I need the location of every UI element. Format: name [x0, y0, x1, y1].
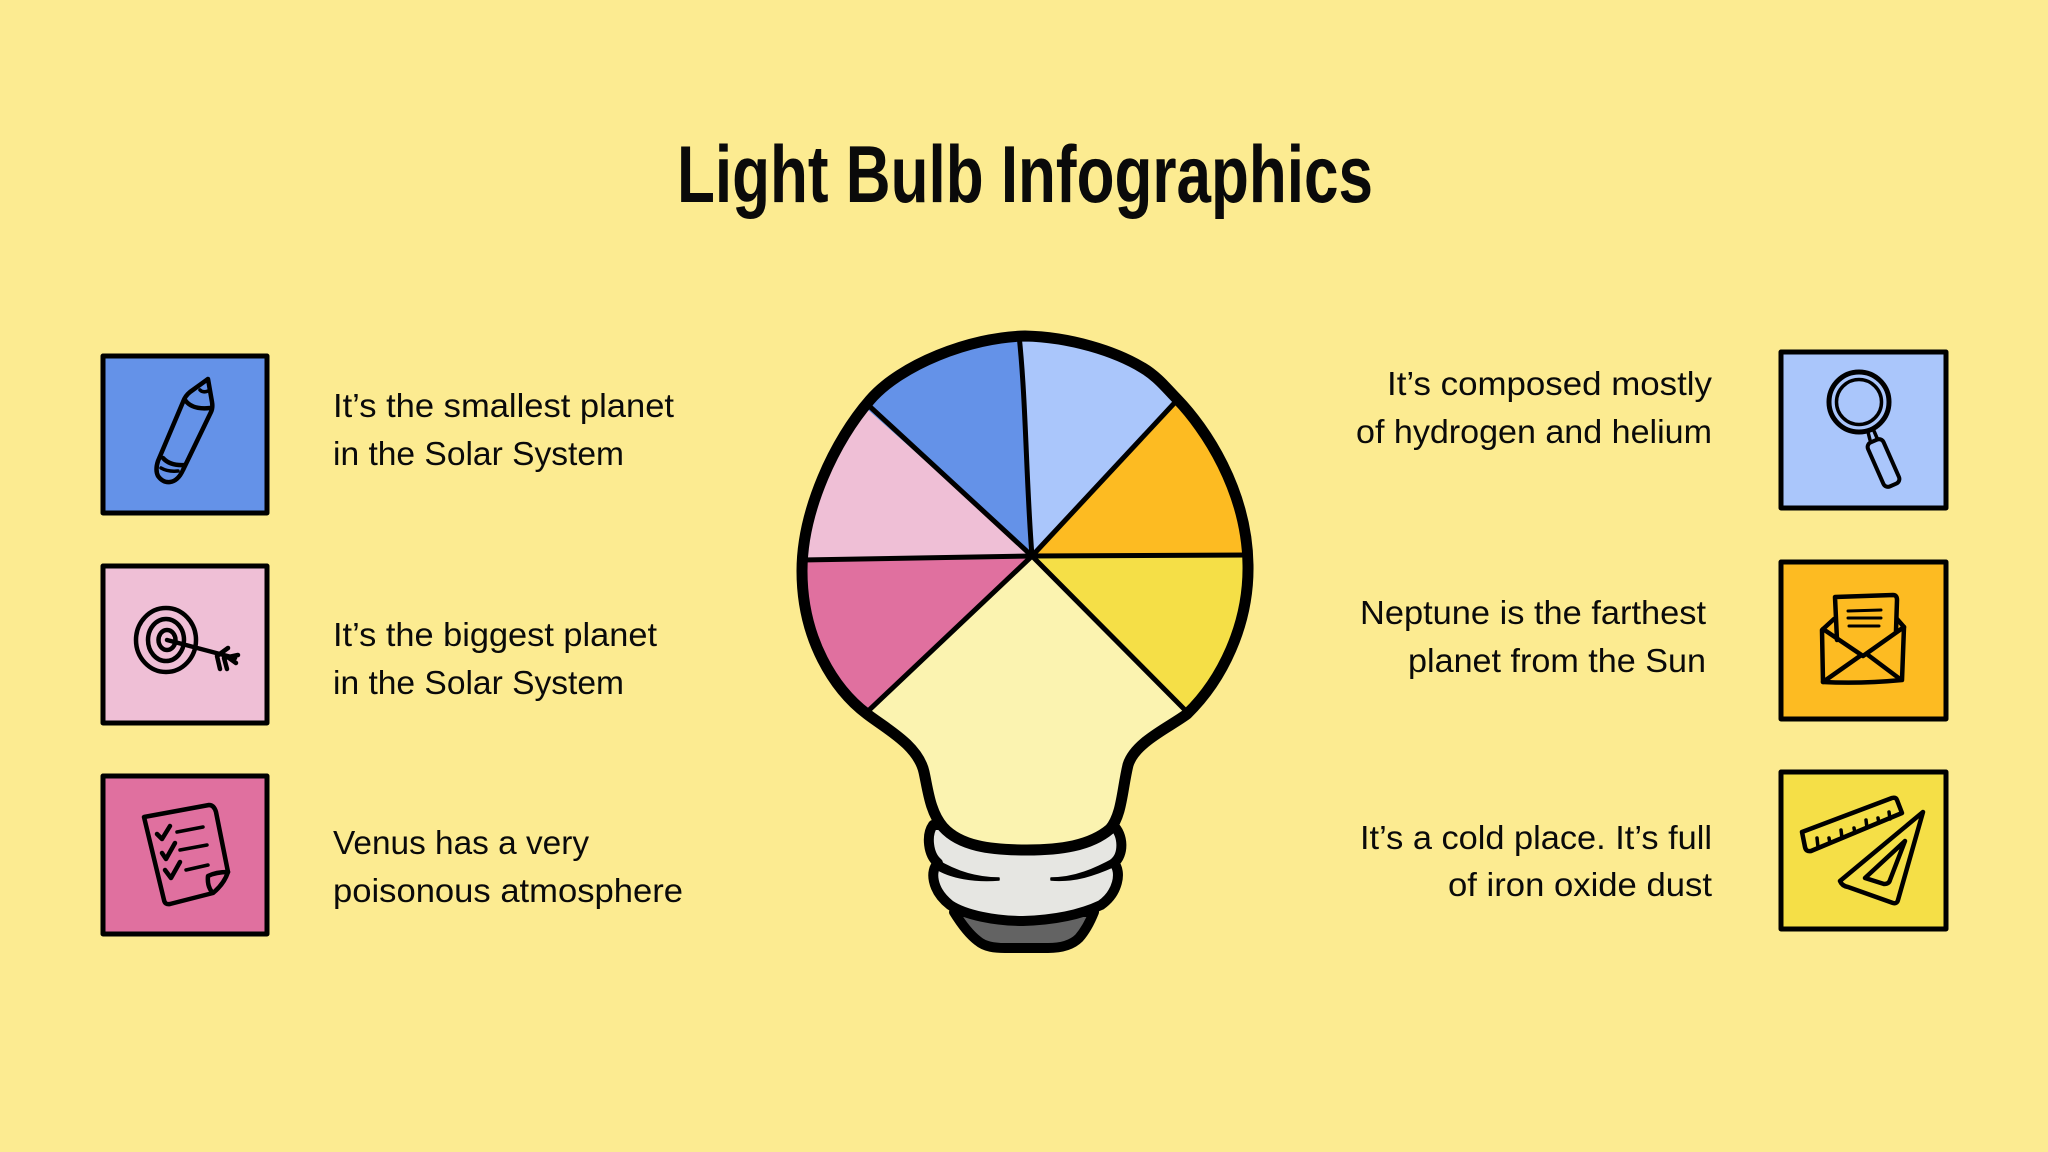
panel: smallest planet [103, 356, 674, 513]
segment: yellow [1038, 558, 1242, 710]
segment dividers [800, 335, 1250, 714]
icon: target with arrow [136, 608, 238, 672]
icon box: pink [103, 566, 267, 723]
icon: magnifying glass [1829, 372, 1901, 488]
text: biggest planet: in the Solar System [333, 664, 624, 701]
icon: checklist document [144, 805, 228, 904]
bulb cap [954, 912, 1094, 948]
title: Light Bulb Infographics [677, 130, 1373, 220]
text: biggest planet: It’s the biggest planet [333, 616, 657, 653]
icon: ruler and set square [1802, 798, 1923, 903]
bulb outline [802, 336, 1248, 850]
text: Venus: Venus has a very [333, 824, 590, 861]
icon box: light blue [1781, 352, 1946, 508]
text: Neptune: Neptune is the farthest [1360, 594, 1706, 631]
segment: dark pink [808, 558, 1026, 708]
segment: cream [872, 560, 1182, 844]
bulb glass segments [808, 342, 1242, 844]
text: Venus: poisonous atmosphere [333, 872, 683, 909]
panel: cold place [1360, 772, 1946, 929]
infographic canvas [100, 144, 1948, 953]
segment: light blue [1022, 342, 1172, 550]
panel: Neptune [1360, 562, 1946, 719]
icon: open envelope with letter [1822, 595, 1904, 683]
bulb screw base [929, 825, 1121, 921]
panel: Venus [103, 776, 683, 934]
segment: blue [868, 342, 1029, 550]
panel: hydrogen and helium [1356, 352, 1946, 508]
text: cold place: of iron oxide dust [1448, 866, 1712, 903]
text: smallest planet: in the Solar System [333, 435, 624, 472]
text: Neptune: planet from the Sun [1408, 642, 1706, 679]
icon box: yellow [1781, 772, 1946, 929]
text: cold place: It’s a cold place. It’s full [1360, 819, 1712, 856]
light bulb [796, 330, 1254, 953]
icon: pencil [156, 379, 212, 482]
icon box: orange [1781, 562, 1946, 719]
panel: biggest planet [103, 566, 657, 723]
text: hydrogen and helium: of hydrogen and helium [1356, 413, 1712, 450]
text: hydrogen and helium: It’s composed mostly [1387, 365, 1713, 402]
icon box: dark pink [103, 776, 267, 934]
segment: pink [808, 410, 1026, 558]
segment: orange [1038, 406, 1242, 554]
text: smallest planet: It’s the smallest planet [333, 387, 674, 424]
icon box: blue [103, 356, 267, 513]
